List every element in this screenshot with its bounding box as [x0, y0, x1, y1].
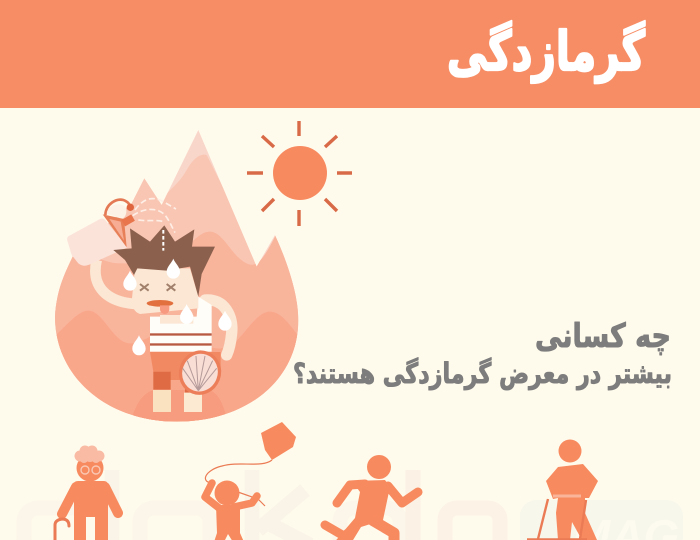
flame background: [55, 130, 298, 422]
face: [132, 268, 198, 314]
figure: person with walker: [527, 440, 598, 540]
watermark: [24, 470, 683, 540]
figure: running person: [325, 455, 418, 540]
right arm: [205, 300, 232, 355]
water dashes: [133, 199, 176, 233]
eyes: [140, 284, 175, 291]
figure: child flying a kite: [205, 422, 296, 540]
bucket: [67, 200, 135, 266]
mouth: [147, 300, 173, 314]
figure: elderly man with cane: [55, 446, 118, 540]
subheading: [293, 316, 672, 390]
left arm: [95, 260, 135, 304]
header band: [0, 0, 700, 108]
subheading line 1: چه کسانی: [535, 316, 671, 355]
sun icon: [247, 121, 352, 226]
hair: [74, 446, 104, 463]
shirt: [150, 297, 212, 352]
neck and body: [150, 297, 232, 412]
dashes on head: [160, 230, 166, 251]
cane: [55, 519, 69, 540]
fan: [175, 347, 225, 399]
flame with heatstroke character: [55, 130, 298, 422]
hair: [113, 225, 215, 297]
glasses: [81, 466, 100, 474]
sweat drops: [123, 259, 232, 355]
shorts and legs: [150, 352, 221, 380]
